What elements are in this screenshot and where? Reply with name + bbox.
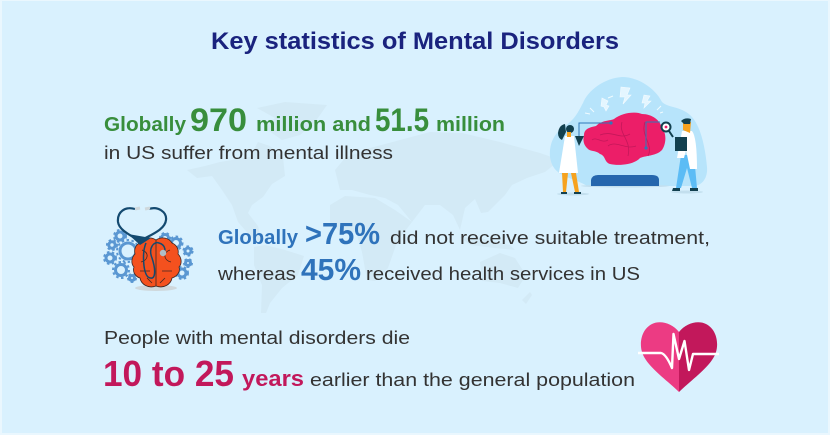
stat block: 970 million and 51.5 million <box>104 102 505 163</box>
icon: backdrop blob <box>550 77 707 186</box>
stat block: life expectancy: years <box>242 366 304 391</box>
stat block: life expectancy: earlier than the general population <box>310 369 635 390</box>
stat block: treatment <box>217 216 710 287</box>
illustration: doctors examining brain <box>550 77 707 196</box>
icon: heart with pulse <box>638 322 719 392</box>
stat block: 970 million and 51.5 million: in US suffer from mental illness <box>104 142 393 163</box>
stat block: life expectancy: 10 to 25 <box>103 353 234 394</box>
world map background <box>187 102 560 313</box>
stat block: treatment: did not receive suitable treatment, <box>390 227 710 248</box>
stat block: 970 million and 51.5 million: million and <box>256 114 371 136</box>
icon: gears <box>104 230 193 282</box>
icon: male doctor <box>662 118 703 194</box>
title: Key statistics of Mental Disorders <box>211 28 619 55</box>
icon: brain with stethoscope and gears <box>104 208 193 291</box>
stat block: treatment: whereas <box>217 263 296 284</box>
icon: orange brain <box>132 238 181 287</box>
stat block: 970 million and 51.5 million: 970 <box>190 102 247 138</box>
stat block: 970 million and 51.5 million: Globally <box>104 114 187 136</box>
stat block: treatment: received health services in US <box>366 263 640 284</box>
stat block: 970 million and 51.5 million: 51.5 <box>375 102 429 138</box>
stat block: treatment: Globally <box>218 227 299 249</box>
stat block: 970 million and 51.5 million: million <box>436 114 505 136</box>
icon: spark lines <box>585 96 663 114</box>
stat block: life expectancy <box>103 327 635 394</box>
icon: shadow <box>135 285 177 291</box>
stat block: life expectancy: People with mental disorders die <box>104 327 410 348</box>
icon: connector lines <box>579 123 611 138</box>
icon: blue platform <box>581 184 669 188</box>
icon: stethoscope <box>118 208 166 241</box>
icon: pink brain <box>583 113 665 165</box>
stat block: treatment: >75% <box>305 216 380 251</box>
icon: lightning bolts <box>601 87 651 111</box>
stat block: treatment: 45% <box>301 252 361 287</box>
icon: female doctor <box>557 124 589 196</box>
